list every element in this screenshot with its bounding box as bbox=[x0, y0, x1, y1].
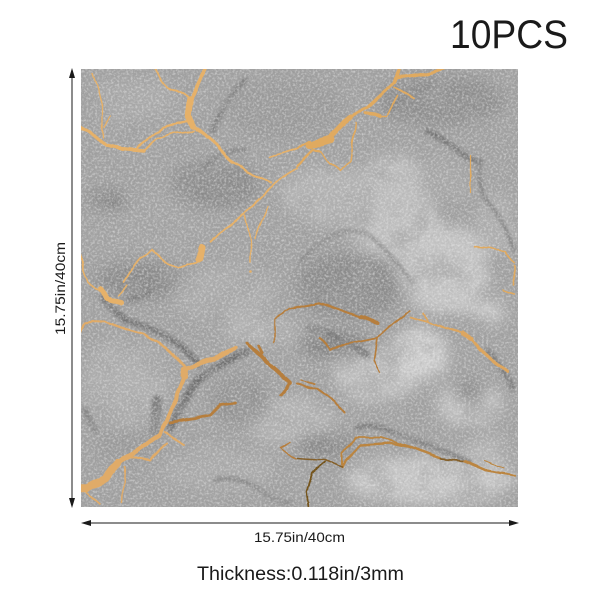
marble base bbox=[81, 69, 518, 507]
heading: 10PCS: 10PCS bbox=[450, 13, 568, 57]
vein: lower left junction bbox=[78, 320, 236, 504]
marble tonal clouds bbox=[80, 69, 520, 507]
vein: bronze center branches bbox=[170, 302, 410, 458]
vein: bottom sweep bbox=[298, 438, 514, 508]
marble tile panel bbox=[78, 66, 520, 508]
arrow: vertical dimension bbox=[69, 68, 75, 508]
label: width: 15.75in/40cm bbox=[254, 529, 345, 545]
vein: upper right branch bbox=[298, 66, 514, 294]
gold veins bbox=[78, 66, 514, 508]
vein: upper left network bbox=[78, 66, 298, 302]
arrow: horizontal dimension bbox=[81, 520, 519, 526]
label: thickness: Thickness:0.118in/3mm bbox=[197, 563, 404, 585]
vein: right diagonal bbox=[410, 314, 508, 372]
label: height: 15.75in/40cm bbox=[52, 242, 68, 335]
